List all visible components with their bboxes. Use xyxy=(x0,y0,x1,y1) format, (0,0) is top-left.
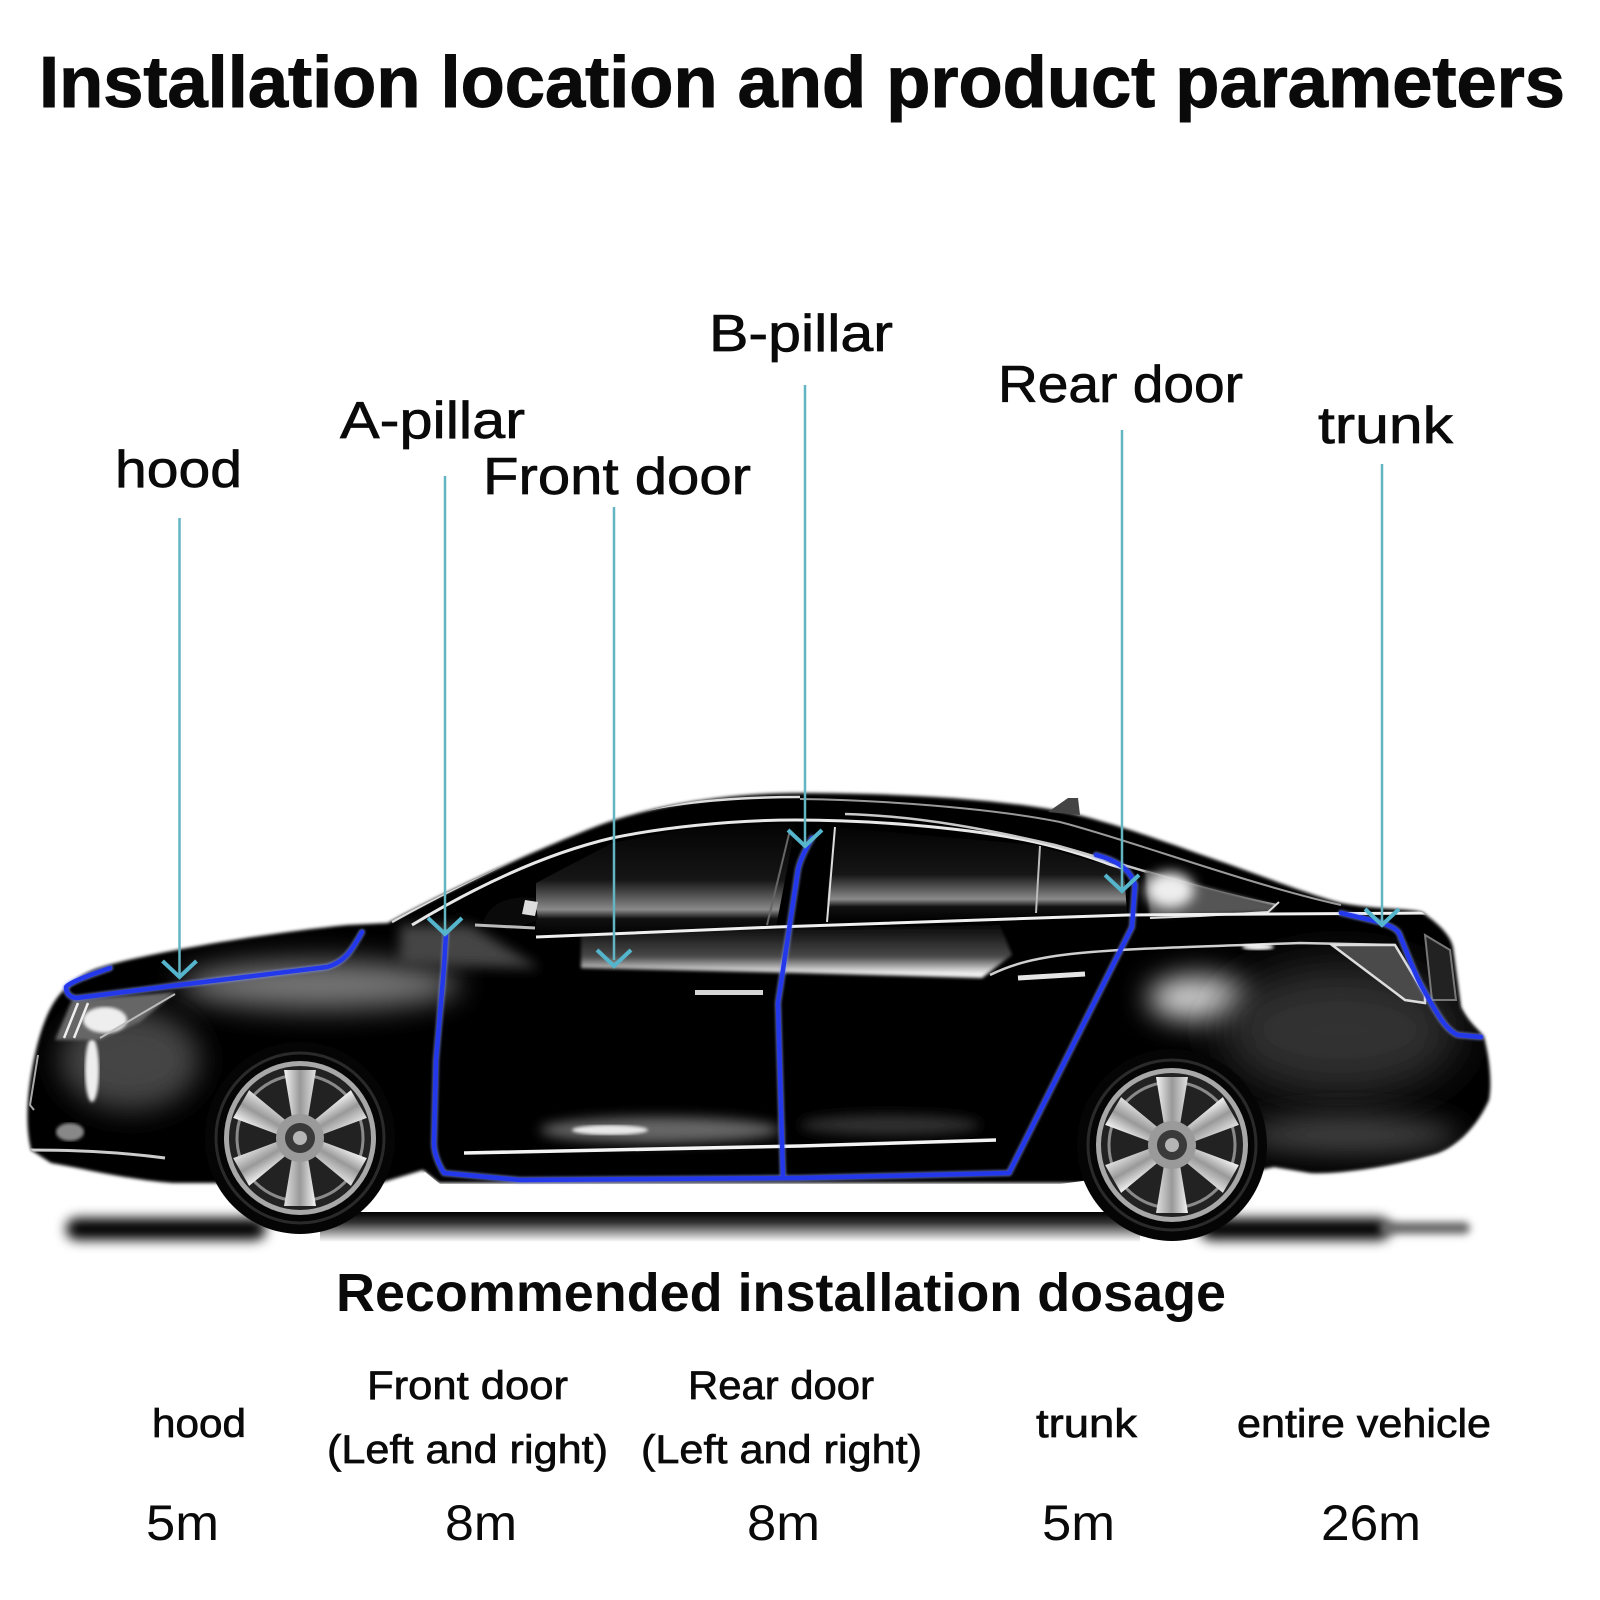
front window xyxy=(536,838,792,934)
sill white gap xyxy=(375,1172,1115,1212)
blue weatherstrip lines xyxy=(66,838,1481,1180)
heading: recommended dosage: Recommended installation dosage xyxy=(336,1263,1226,1323)
side mirror xyxy=(475,897,538,930)
dosage table xyxy=(146,1364,1491,1551)
callout: Rear door xyxy=(998,356,1243,891)
callout: Front door: Front door xyxy=(483,448,751,506)
callout: trunk: trunk xyxy=(1318,397,1454,455)
column: entire vehicle xyxy=(1237,1402,1491,1551)
column: hood: 5m xyxy=(146,1495,219,1551)
column: rear door: Rear door xyxy=(688,1364,874,1408)
column: front door: Front door xyxy=(367,1364,568,1408)
column: front door xyxy=(327,1364,608,1551)
front grille and bumper xyxy=(30,1055,38,1110)
callout: hood: hood xyxy=(115,441,242,499)
shoulder line xyxy=(990,943,1395,975)
car body xyxy=(27,793,1490,1183)
callout: trunk xyxy=(1318,397,1454,925)
rear wheel xyxy=(1077,1049,1267,1241)
head light xyxy=(55,992,175,1040)
sill trim xyxy=(464,1140,996,1153)
column: trunk: 5m xyxy=(1042,1495,1115,1551)
tail light xyxy=(1332,945,1425,1003)
callout: Front door xyxy=(483,448,751,966)
column: trunk: trunk xyxy=(1036,1402,1138,1446)
column: entire vehicle: 26m xyxy=(1321,1495,1421,1551)
column: rear door: 8m xyxy=(747,1495,820,1551)
column: trunk xyxy=(1036,1402,1138,1551)
door handles xyxy=(695,990,763,995)
column: hood: hood xyxy=(152,1402,246,1446)
rear quarter glass xyxy=(1145,870,1276,916)
body highlights xyxy=(180,961,460,1009)
column: entire vehicle: entire vehicle xyxy=(1237,1402,1491,1446)
car illustration xyxy=(27,793,1490,1242)
belt line xyxy=(536,913,1428,937)
callout: A-pillar: A-pillar xyxy=(340,392,525,450)
callout: A-pillar xyxy=(340,392,525,934)
column: front door: 8m xyxy=(445,1495,517,1551)
ground shadow xyxy=(66,1212,1470,1242)
callout: B-pillar: B-pillar xyxy=(709,305,893,363)
column: front door: (Left and right) xyxy=(327,1428,608,1472)
rear window xyxy=(827,840,1127,914)
column: hood xyxy=(146,1402,246,1551)
antenna xyxy=(1048,798,1080,815)
A-pillar and roof trim xyxy=(392,797,800,922)
title: Installation location and product parameters xyxy=(39,43,1565,123)
callout: Rear door: Rear door xyxy=(998,356,1243,414)
callout: hood xyxy=(115,441,242,977)
callout: B-pillar xyxy=(709,305,893,846)
column: rear door xyxy=(641,1364,922,1551)
column: rear door: (Left and right) xyxy=(641,1428,922,1472)
front wheel xyxy=(205,1042,395,1234)
